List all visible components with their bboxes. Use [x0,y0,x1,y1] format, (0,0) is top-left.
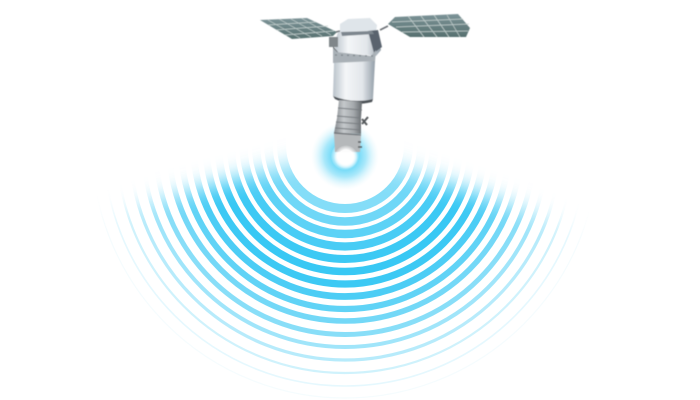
upper module [329,18,382,58]
signal rings [104,150,581,398]
right solar panel [380,14,470,37]
main hull [333,61,375,101]
exhaust core [334,145,358,169]
collar [333,48,376,63]
lower neck [334,100,368,152]
left solar panel [260,18,345,39]
glow [311,122,379,190]
satellite [260,14,470,152]
